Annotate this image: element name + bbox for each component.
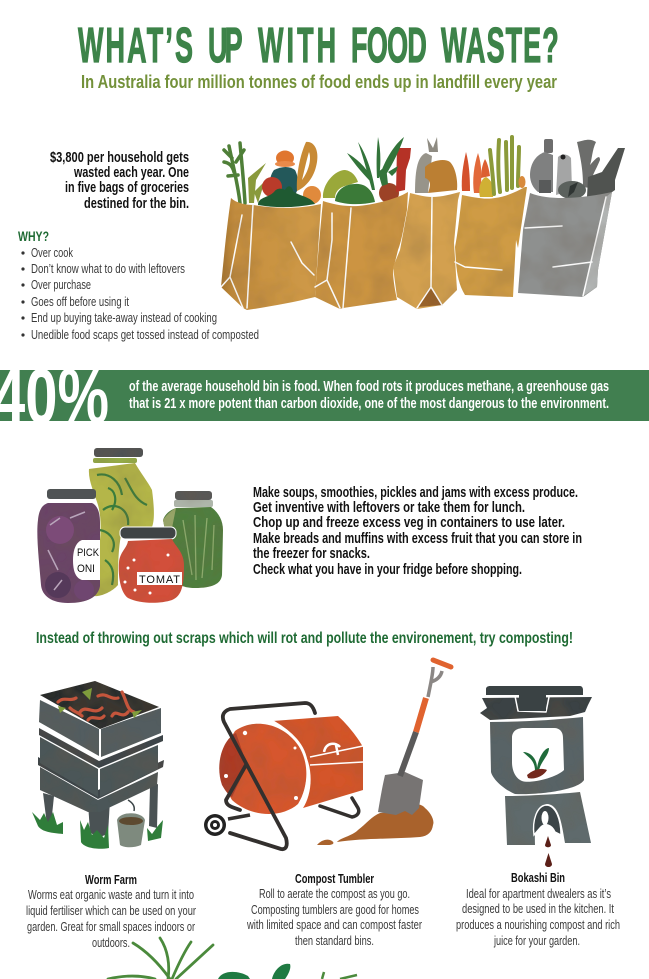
tap <box>534 805 561 835</box>
caption: bokashi bin: juice for your garden. <box>493 934 580 948</box>
bag 1 <box>221 198 321 310</box>
soil <box>317 804 433 845</box>
drum <box>219 716 363 814</box>
bucket <box>117 800 145 847</box>
bag 4 <box>455 187 527 297</box>
list: reasons for waste: Over cook <box>31 246 74 260</box>
shovel blade <box>378 772 423 815</box>
jar: pickles <box>89 448 154 596</box>
text block: tips: Get inventive with leftovers or take them for lunch. <box>253 500 525 516</box>
text block: household cost: in five bags of groceries <box>65 180 189 196</box>
title: WHAT’S <box>78 19 193 73</box>
bins <box>38 681 164 812</box>
label: pickled onions: PICK <box>77 547 100 559</box>
caption: compost tumbler: Roll to aerate the compost as you go. <box>259 887 410 901</box>
produce: bag 1 <box>224 142 321 207</box>
juice drops <box>545 836 552 867</box>
banner: 40 percent <box>0 352 649 440</box>
jar: pickled onions <box>37 489 100 603</box>
text block: household cost: destined for the bin. <box>84 196 189 212</box>
caption: worm farm: outdoors. <box>92 936 130 950</box>
sprout <box>523 748 549 779</box>
caption: bokashi bin: Bokashi Bin <box>511 870 565 885</box>
produce: bag 5 <box>530 139 625 199</box>
caption: worm farm <box>26 872 196 950</box>
title: WASTE? <box>441 19 559 73</box>
list: reasons for waste: Unedible food scaps get tossed instead of composted <box>31 328 259 342</box>
caption: compost tumbler <box>246 871 422 948</box>
title: UP <box>208 19 243 73</box>
caption: compost tumbler: with limited space and can compost faster <box>246 918 422 932</box>
list: reasons for waste: Goes off before using it <box>31 295 129 309</box>
frame <box>223 703 315 849</box>
bin window <box>512 728 564 782</box>
bag 5 <box>518 192 612 297</box>
banner text <box>129 378 609 412</box>
caption: worm farm: liquid fertiliser which can be used on your <box>26 904 196 918</box>
shovel shaft <box>400 732 416 776</box>
text block: household cost: $3,800 per household gets <box>50 150 189 166</box>
label: tomato: TOMAT <box>139 574 180 586</box>
list: reasons for waste <box>21 246 259 342</box>
legs <box>43 784 158 838</box>
caption: compost tumbler: Composting tumblers are good for homes <box>251 903 419 917</box>
illustration: grocery bags <box>221 137 625 310</box>
back leg <box>320 798 359 817</box>
illustration: shovel and soil <box>317 660 451 845</box>
illustration: plant at bottom <box>108 938 357 979</box>
label: pickled onions: ONI <box>77 563 95 575</box>
list: reasons for waste: Don’t know what to do with leftovers <box>31 262 185 276</box>
text block: tips <box>253 485 582 578</box>
wheel <box>204 814 226 836</box>
text block: tips: Chop up and freeze excess veg in containers to use later. <box>253 515 565 531</box>
text block: household cost <box>50 150 189 212</box>
text block: tips: the freezer for snacks. <box>253 546 370 562</box>
caption: compost tumbler: Compost Tumbler <box>295 871 374 886</box>
illustration: worm farm <box>32 681 164 849</box>
label: pickled onions <box>73 540 100 580</box>
bag 2 <box>315 192 408 309</box>
caption: worm farm: Worms eat organic waste and turn it into <box>28 888 194 902</box>
bag 3 <box>393 192 460 309</box>
worms <box>58 692 134 720</box>
title: WITH <box>258 19 336 73</box>
caption: compost tumbler: then standard bins. <box>295 934 374 948</box>
produce: bag 3 <box>415 137 457 193</box>
title: FOOD <box>351 19 427 73</box>
jar: green beans <box>163 491 223 588</box>
text block: household cost: wasted each year. One <box>73 165 189 181</box>
caption: worm farm: Worm Farm <box>85 872 137 887</box>
produce: bag 2 <box>323 137 411 204</box>
text block: tips: Check what you have in your fridge before shopping. <box>253 562 522 578</box>
list: reasons for waste: Over purchase <box>31 278 91 292</box>
produce: bag 4 <box>462 137 526 197</box>
illustration: compost tumbler <box>204 703 363 849</box>
list: reasons for waste: End up buying take-away instead of cooking <box>31 311 217 325</box>
grass <box>32 812 163 849</box>
caption: worm farm: garden. Great for small spaces indoors or <box>27 920 195 934</box>
bin lid <box>515 696 549 712</box>
illustration: preserve jars <box>37 448 223 603</box>
caption: bokashi bin <box>456 870 620 948</box>
heading: why: WHY? <box>18 228 49 244</box>
bin body <box>480 697 592 845</box>
illustration: bokashi bin <box>480 686 592 867</box>
title <box>78 19 559 73</box>
jar: tomato <box>119 527 184 603</box>
